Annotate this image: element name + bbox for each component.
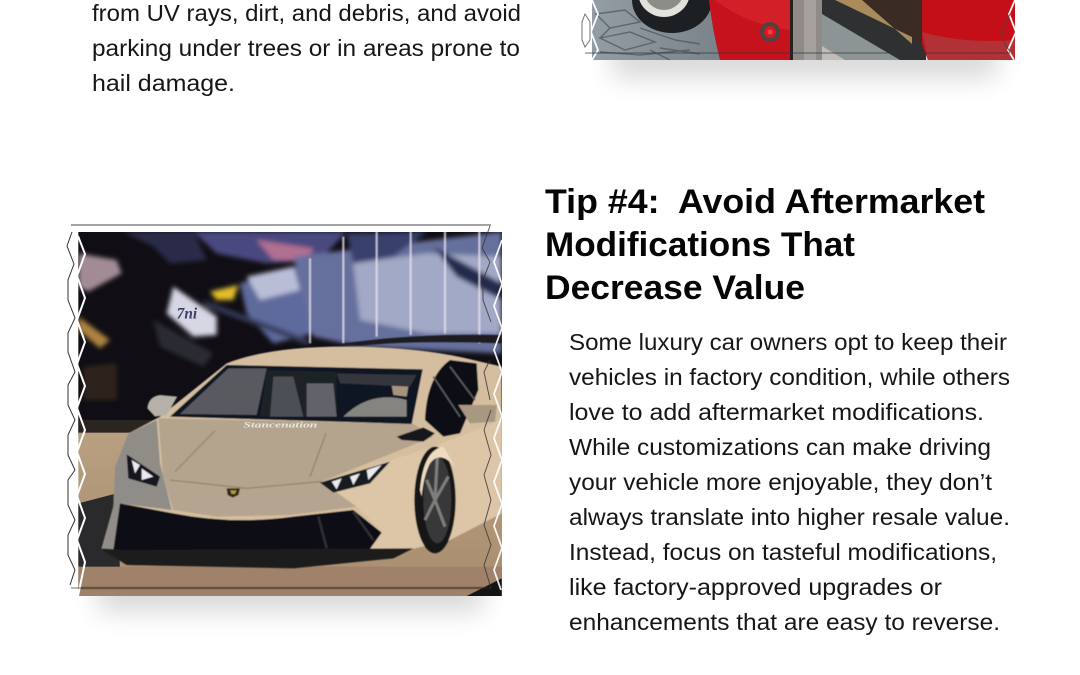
body paragraph: Tip #4: love to add aftermarket modifications. [569,399,984,425]
mirrors [147,395,177,417]
graffiti wall: 7ni [177,305,198,322]
windshield [170,365,423,424]
wheel [414,447,456,553]
body paragraph: Tip #4: always translate into higher resale value. [569,504,1010,530]
white zig-zag edges [591,0,1016,60]
car body [102,347,502,567]
hood [158,418,433,488]
top paragraph continuation: from UV rays, dirt, and debris, and avoid [92,0,521,26]
body paragraph: Tip #4 [569,329,1010,635]
body paragraph: Tip #4: Some luxury car owners opt to keep their [569,329,1007,355]
heading: Tip #4: Tip #4: Avoid Aftermarket [545,183,985,221]
floor [78,420,503,597]
body paragraph: Tip #4: Instead, focus on tasteful modifications, [569,539,997,565]
heading: Tip #4: Modifications That [545,226,855,264]
windshield banner: Stancenation [243,419,318,429]
top paragraph continuation: parking under trees or in areas prone to [92,35,520,61]
hood creases [170,431,326,488]
right fender highlight [339,423,502,548]
graffiti wall [78,232,503,435]
body paragraph: Tip #4: vehicles in factory condition, while others [569,364,1010,390]
zig-zag frame overlay around Lamborghini photo [67,225,502,596]
badge [227,488,240,498]
top paragraph continuation [92,0,521,96]
top image: red car door crop [582,0,1016,60]
heading: Tip #4: Decrease Value [545,269,805,307]
image shadow: Lamborghini photo [98,570,483,612]
image shadow: top photo [612,38,997,78]
heading: Tip #4 [545,183,985,307]
car left shaded flank [102,420,172,550]
left headlight [127,454,160,487]
side window [425,360,478,437]
body paragraph: Tip #4: enhancements that are easy to reverse. [569,609,1000,635]
fender flare [420,447,455,497]
front bumper intake [113,503,382,557]
wing [340,335,502,346]
car [100,335,502,568]
top paragraph continuation: hail damage. [92,70,235,96]
image: beige Lamborghini in front of graffiti wall [78,232,503,597]
right headlight [320,462,390,493]
body paragraph: Tip #4: like factory-approved upgrades or [569,574,942,600]
body paragraph: Tip #4: While customizations can make driving [569,434,991,460]
body paragraph: Tip #4: your vehicle more enjoyable, they don’t [569,469,993,495]
side vent [397,427,435,442]
